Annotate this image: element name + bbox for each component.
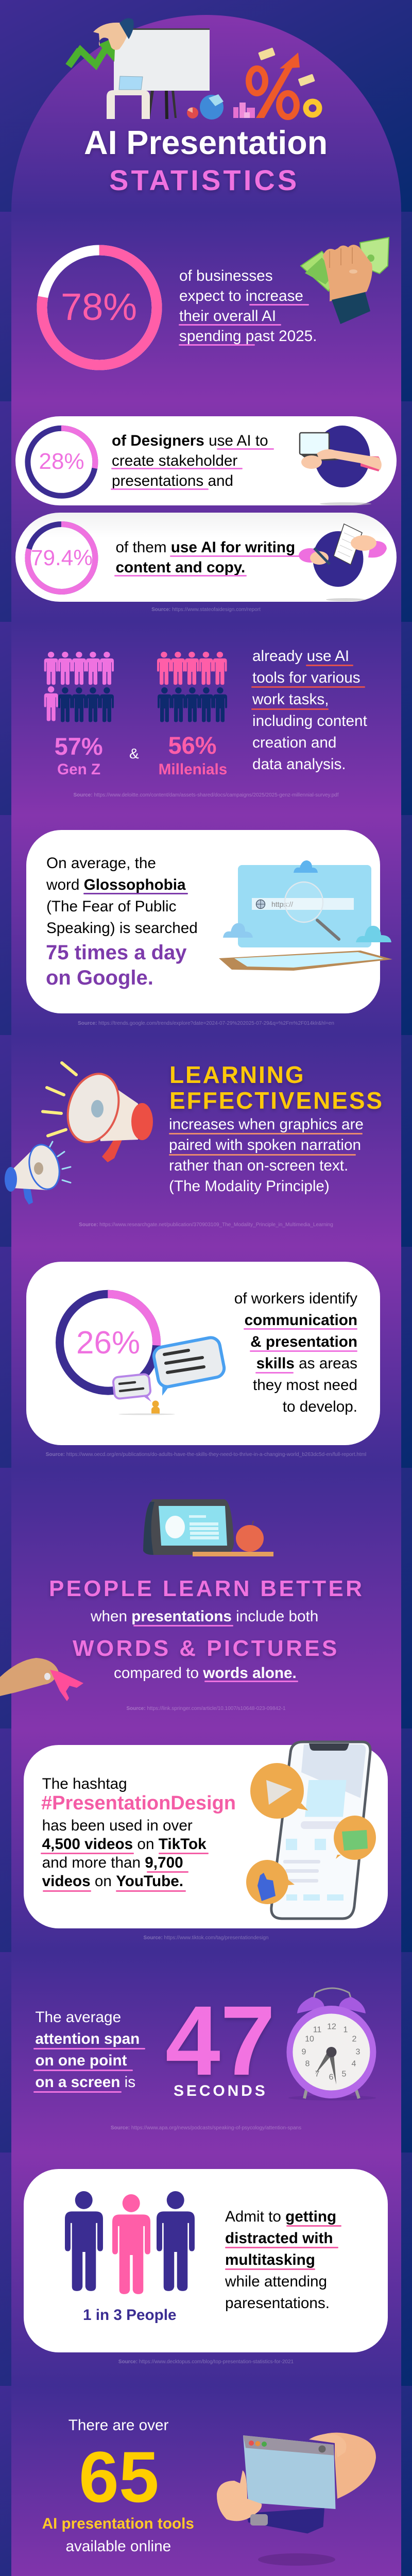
panel: 65 AI tools	[0, 2386, 412, 2576]
illustration: alarm clock: 4	[352, 2060, 356, 2068]
card: 1 in 3 people	[24, 2169, 388, 2352]
text: AI tools: creation and	[252, 734, 336, 751]
text: workers: they most need	[253, 1377, 357, 1394]
stat: 56%: 56%	[168, 732, 217, 759]
text: distracted: while attending	[225, 2273, 327, 2290]
text: workers	[234, 1290, 357, 1415]
text: glossophobia: Speaking) is searched	[46, 920, 198, 937]
source: Source: https://www.stateofaidesign.com/report	[151, 607, 261, 612]
text: modality principle: increases when graphics are	[169, 1116, 364, 1133]
icon: hands on laptop	[299, 426, 382, 505]
heading: people learn better: PEOPLE LEARN BETTER	[49, 1576, 364, 1601]
source: Source: https://www.decktopus.com/blog/top-presentation-statistics-for-2021	[118, 2359, 294, 2365]
stat: Gen Z pictogram	[44, 652, 114, 778]
text: attention span	[35, 2009, 140, 2091]
text: writing: of them use AI for writing	[115, 539, 295, 556]
panel: hashtag presentation design	[0, 1728, 412, 1952]
text: workers: to develop.	[283, 1398, 357, 1415]
text: glossophobia	[46, 855, 198, 937]
card: 26% of workers	[26, 1262, 380, 1445]
source: Source: https://www.oecd.org/en/publications/do-adults-have-the-skills-they-need-to-thrive-in-a-changing-world_b263dc5d-en/full-report.html	[46, 1452, 366, 1458]
text: when presentations: when presentations include both	[91, 1608, 318, 1625]
illustration: phone with reaction bubbles	[246, 1740, 376, 1920]
panel: 78% of businesses	[0, 212, 412, 401]
hashtag: #PresentationDesign	[41, 1792, 236, 1814]
panel: learning effectiveness	[0, 1035, 412, 1247]
illustration: presentation board with hand, arrow and charts	[65, 18, 322, 120]
stat: 75 times a day: on Google.	[46, 967, 153, 989]
label: 1 in 3 people: 1 in 3 People	[83, 2307, 176, 2324]
source: Source: https://trends.google.com/trends/explore?date=2024-07-29%202025-07-29&q=%2Fm%2F014klr&hl=en	[78, 1020, 334, 1026]
text: businesses: their overall AI	[179, 308, 276, 325]
source: Source: https://www.deloitte.com/content/dam/assets-shared/docs/campaigns/2025/2025-genz-millennial-survey.pdf	[73, 792, 339, 798]
stat: 47: 47	[165, 1985, 276, 2096]
text: AI tools: including content	[252, 713, 367, 730]
illustration: alarm clock: 6	[329, 2073, 334, 2081]
text: designers: presentations and	[112, 472, 233, 489]
panel: header	[0, 0, 412, 212]
text: AI tools: work tasks,	[252, 691, 329, 708]
text: video counts	[42, 1817, 207, 1890]
people icons: 1 in 3	[65, 2191, 195, 2294]
text: glossophobia: On average, the	[46, 855, 156, 872]
text: designers: create stakeholder	[112, 452, 237, 469]
source: Source: https://www.apa.org/news/podcasts/speaking-of-psycology/attention-spans	[111, 2125, 301, 2131]
text: there are over: There are over	[68, 2416, 168, 2434]
stat: 28%: 28%	[39, 449, 84, 474]
label: Millenials: Millenials	[159, 761, 227, 778]
text: distracted	[225, 2206, 336, 2314]
text: workers: communication	[245, 1312, 357, 1329]
label: seconds: SECONDS	[174, 2082, 268, 2099]
text: modality principle	[169, 1116, 364, 1195]
text: available online: available online	[66, 2538, 171, 2555]
text: modality principle: (The Modality Principle)	[169, 1178, 330, 1195]
panel: attention span	[0, 1952, 412, 2153]
text: workers: & presentation	[250, 1333, 357, 1350]
stat: 75 times a day: 75 times a day	[46, 941, 186, 964]
text: glossophobia: word Glossophobia	[46, 876, 186, 893]
ampersand: &	[129, 745, 139, 761]
illustration: alarm clock: 12	[327, 2023, 336, 2031]
label: AI presentation tools: AI presentation tools	[42, 2515, 194, 2532]
source: Source: https://www.tiktok.com/tag/presentationdesign	[144, 1935, 268, 1940]
stat: 57%: 57%	[55, 733, 103, 760]
text: distracted: paresentations.	[225, 2295, 330, 2312]
illustration: alarm clock: 3	[356, 2047, 360, 2057]
text: compared to words alone: compared to words alone.	[114, 1665, 297, 1682]
text: modality principle: rather than on-screen text.	[169, 1157, 348, 1174]
pill: 28% of designers	[15, 416, 397, 505]
text: AI tools: data analysis.	[252, 756, 346, 773]
text: businesses: of businesses	[179, 267, 273, 284]
heading: learning effectiveness	[169, 1061, 384, 1114]
label: Gen Z: Gen Z	[57, 761, 100, 778]
panel: generations	[0, 622, 412, 815]
people icons: Millenials	[157, 652, 227, 722]
text: businesses: expect to increase	[179, 287, 303, 304]
text: workers: of workers identify	[234, 1290, 357, 1307]
illustration: hands holding window	[215, 2429, 378, 2568]
illustration: megaphones	[5, 1061, 153, 1205]
text: video counts: and more than 9,700	[42, 1854, 183, 1871]
illustration: alarm clock: 11	[313, 2026, 321, 2034]
illustration: alarm clock	[286, 1988, 376, 2100]
text: AI tools: already use AI	[252, 648, 349, 665]
donut chart: 79.4%	[25, 521, 98, 595]
donut chart: 28%	[25, 426, 98, 499]
text: video counts: videos on YouTube.	[42, 1873, 183, 1890]
icon: hands with clipboard and pen	[299, 523, 387, 601]
title: AI Presentation	[84, 124, 328, 161]
icon: hand holding money	[300, 237, 389, 324]
text: glossophobia: (The Fear of Public	[46, 898, 176, 915]
illustration: alarm clock: 7	[315, 2070, 320, 2078]
text: modality principle: paired with spoken narration	[169, 1137, 361, 1154]
illustration: alarm clock: 8	[305, 2060, 310, 2068]
illustration: alarm clock: 10	[305, 2035, 314, 2043]
text: distracted: multitasking	[225, 2251, 315, 2268]
text: writing	[115, 539, 295, 576]
arch background	[11, 15, 401, 212]
illustration: alarm clock: 5	[342, 2070, 347, 2078]
subtitle: STATISTICS	[109, 164, 299, 196]
panel: designers	[0, 401, 412, 622]
panel: communication skills	[0, 1247, 412, 1468]
card: glossophobia	[26, 830, 380, 1013]
donut chart: 78%	[37, 245, 162, 370]
donut chart: 26%	[56, 1290, 161, 1395]
text: distracted: Admit to getting	[225, 2208, 336, 2225]
illustration: alarm clock: 1	[344, 2026, 348, 2034]
text: designers	[112, 432, 268, 489]
text: AI tools	[252, 648, 367, 773]
heading: learning effectiveness: EFFECTIVENESS	[169, 1087, 384, 1114]
illustration: browser search on tablet	[219, 860, 392, 971]
panel: glossophobia	[0, 815, 412, 1035]
text: designers: of Designers use AI to	[112, 432, 268, 449]
stat: 75 times a day	[46, 941, 186, 989]
stat: 78%: 78%	[61, 285, 137, 328]
text: workers: skills as areas	[256, 1355, 357, 1372]
stat: 79.4%: 79.4%	[31, 546, 93, 570]
illustration: alarm clock: 9	[302, 2047, 306, 2057]
source: Source: https://link.springer.com/article/10.1007/s10648-023-09842-1	[126, 1705, 286, 1711]
icon: device with apple	[143, 1499, 273, 1556]
stat: Millenials pictogram	[157, 652, 227, 778]
people icons: Gen Z	[44, 652, 114, 722]
illustration: hand holding letter A	[0, 1658, 83, 1701]
heading: learning effectiveness: LEARNING	[169, 1061, 305, 1088]
panel: words and pictures	[0, 1468, 412, 1728]
text: businesses	[179, 267, 317, 345]
icon: speech bubbles with person	[112, 1336, 226, 1415]
text: distracted: distracted with	[225, 2230, 333, 2247]
text: attention span: The average	[35, 2009, 121, 2026]
source: Source: https://www.researchgate.net/publication/370903109_The_Modality_Principle_in_Multimedia_Learning	[79, 1222, 333, 1228]
text: attention span: attention span	[35, 2030, 140, 2047]
text: writing: content and copy.	[115, 559, 245, 576]
text: video counts: 4,500 videos on TikTok	[42, 1836, 207, 1853]
stat: 26%: 26%	[76, 1325, 140, 1361]
stat: 65: 65	[79, 2436, 159, 2517]
illustration: alarm clock: 2	[352, 2035, 357, 2043]
text: AI tools: tools for various	[252, 669, 360, 686]
panel: multitasking	[0, 2153, 412, 2386]
text: video counts: has been used in over	[42, 1817, 193, 1834]
text: attention span: on one point	[35, 2052, 127, 2069]
card: hashtag	[24, 1745, 388, 1928]
illustration: browser search on tablet: https://	[271, 900, 293, 908]
text: attention span: on a screen is	[35, 2074, 135, 2091]
text: businesses: spending past 2025.	[179, 328, 317, 345]
pill: 79.4% of them	[15, 513, 397, 602]
heading: words and pictures: WORDS & PICTURES	[73, 1636, 339, 1661]
text: the hashtag: The hashtag	[42, 1775, 127, 1792]
